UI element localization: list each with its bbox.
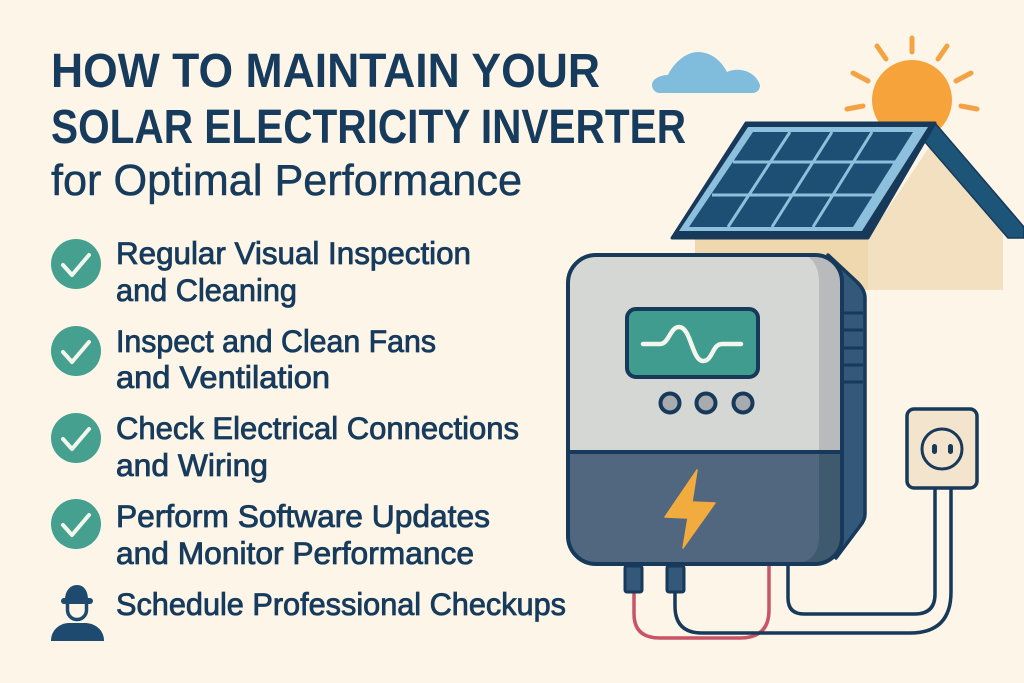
title bbox=[51, 45, 686, 154]
panel cells bbox=[689, 132, 913, 227]
navy cable to outlet bbox=[675, 488, 951, 633]
item: visual inspection: Regular Visual Inspection bbox=[116, 235, 471, 271]
panel frame bbox=[672, 123, 935, 238]
item: connections: Check Electrical Connections bbox=[116, 410, 519, 446]
item: professional checkups: Schedule Professional Checkups bbox=[116, 586, 566, 622]
connectors bbox=[625, 566, 684, 592]
inverter outline bbox=[568, 255, 842, 564]
item: software: and Monitor Performance bbox=[116, 535, 474, 571]
item: connections: and Wiring bbox=[116, 447, 268, 483]
icon: lightning bolt bbox=[665, 470, 715, 548]
title: SOLAR ELECTRICITY INVERTER bbox=[51, 101, 686, 154]
inverter bbox=[568, 255, 865, 564]
display screen bbox=[627, 309, 758, 377]
wall outlet bbox=[907, 409, 977, 488]
control buttons bbox=[660, 394, 752, 412]
inverter side bbox=[828, 255, 865, 558]
cables bbox=[634, 488, 951, 638]
item: fans: and Ventilation bbox=[116, 359, 330, 395]
navy cable two bbox=[788, 488, 935, 614]
house wall bbox=[695, 146, 1003, 290]
item: visual inspection bbox=[51, 235, 471, 308]
item: visual inspection: and Cleaning bbox=[116, 272, 297, 308]
red cable bbox=[634, 566, 769, 638]
inverter body bottom bbox=[568, 452, 842, 564]
side vents bbox=[844, 313, 863, 382]
panel glass border bbox=[679, 127, 928, 231]
item: professional checkups bbox=[51, 585, 566, 641]
item: software bbox=[51, 498, 490, 571]
item: fans: Inspect and Clean Fans bbox=[116, 323, 436, 359]
title: HOW TO MAINTAIN YOUR bbox=[51, 45, 600, 98]
icon: cloud bbox=[652, 52, 760, 93]
icon: sun bbox=[847, 38, 977, 140]
checklist bbox=[51, 235, 566, 641]
roof with solar panel bbox=[672, 123, 1024, 238]
item: connections bbox=[51, 410, 519, 483]
roof right slope bbox=[925, 123, 1024, 238]
item: fans bbox=[51, 323, 436, 395]
subtitle: for Optimal Performance bbox=[51, 156, 522, 205]
inverter body top bbox=[568, 255, 842, 452]
item: software: Perform Software Updates bbox=[116, 498, 490, 534]
